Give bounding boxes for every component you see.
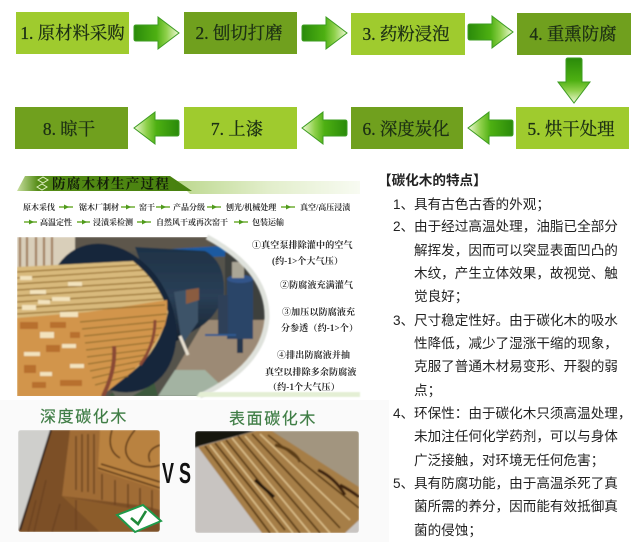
production flow text: 高温定性 xyxy=(40,217,72,227)
point 2: 2、 xyxy=(393,219,414,234)
step 1 xyxy=(16,12,129,54)
point 1: 具有古色古香的外观； xyxy=(414,196,550,213)
production flow text: 产品分级 xyxy=(173,202,205,212)
VS label: VS xyxy=(162,458,196,490)
heading band xyxy=(17,176,360,194)
point 5 xyxy=(393,475,618,539)
arrow 2 to 3 xyxy=(302,17,347,49)
numbered process notes: ③加压以防腐液充 xyxy=(282,306,355,317)
numbered process notes: （约-1个大气压） xyxy=(268,381,340,392)
step 5: 5. 烘干处理 xyxy=(528,119,615,139)
arrow 6 to 7 xyxy=(302,112,347,144)
heading band: 防腐木材生产过程 xyxy=(52,176,170,192)
production flow text: 包装运输 xyxy=(252,217,284,227)
point 5: 5、 xyxy=(393,476,414,491)
numbered process notes: ②防腐液充满灌气 xyxy=(280,279,353,290)
white curved panel edge xyxy=(200,237,267,396)
arrow 5 to 6 xyxy=(468,112,513,144)
numbered process notes: ④排出防腐液并抽 xyxy=(277,349,350,360)
step 6: 6. 深度炭化 xyxy=(363,119,449,139)
arrow 4 to 5 xyxy=(558,58,590,103)
floor xyxy=(175,319,265,384)
step 3 xyxy=(351,13,465,55)
numbered process notes xyxy=(252,239,358,392)
production flow text: 真空/高压浸渍 xyxy=(300,202,351,212)
point 1: 1、 xyxy=(393,197,414,212)
photo: surface carbonized wood xyxy=(195,431,359,533)
point 3: 尺寸稳定性好。由于碳化木的吸水 xyxy=(414,313,618,328)
point 3: 性降低，减少了湿涨干缩的现象， xyxy=(414,336,618,351)
step 8 xyxy=(15,107,128,149)
point 4 xyxy=(393,405,632,469)
point 3: 3、 xyxy=(393,313,414,328)
panel: preservative wood production process xyxy=(17,176,360,415)
numbered process notes: 分参透（约-1>个） xyxy=(281,322,358,333)
photo: deep carbonized wood xyxy=(18,430,160,532)
production flow text: 原木采伐 xyxy=(23,202,55,212)
heading: 【碳化木的特点】 xyxy=(378,172,487,188)
point 3 xyxy=(393,313,618,399)
lumber stack xyxy=(17,261,168,397)
tank body xyxy=(135,247,224,345)
production flow text xyxy=(23,202,351,227)
point 5: 菌的侵蚀； xyxy=(414,522,482,539)
icon: green check badge xyxy=(117,505,161,532)
production flow text: 窑干 xyxy=(139,202,155,212)
production flow text: 浸渍采检测 xyxy=(93,217,133,227)
point 2: 觉良好； xyxy=(414,289,468,305)
point 5: 具有防腐功能，由于高温杀死了真 xyxy=(414,475,618,491)
point 3: 点； xyxy=(414,383,441,399)
photo: wood stack entering treatment tank xyxy=(17,237,266,396)
step 7 xyxy=(184,107,297,149)
flow chart: eight process steps xyxy=(15,12,631,149)
point 4: 未加注任何化学药剂，可以与身体 xyxy=(414,429,618,444)
point 2: 解挥发，因而可以突显表面凹凸的 xyxy=(414,243,618,258)
point 4: 4、 xyxy=(393,406,414,421)
point 4: 环保性：由于碳化木只须高温处理， xyxy=(414,405,632,421)
step 2: 2. 刨切打磨 xyxy=(196,23,282,43)
production flow text: 锯木厂制材 xyxy=(79,202,119,212)
step 4 xyxy=(517,13,631,55)
step 5 xyxy=(516,107,629,149)
background panel: lower left xyxy=(0,400,389,542)
point 3: 克服了普通木材易变形、开裂的弱 xyxy=(414,359,618,374)
bottom green fade xyxy=(196,392,360,397)
label: surface carbonized: 表面碳化木 xyxy=(229,410,317,428)
tank rim xyxy=(58,243,176,393)
arrow 7 to 8 xyxy=(134,112,179,144)
step 1: 1. 原材料采购 xyxy=(20,23,125,43)
step 6 xyxy=(351,107,463,149)
point 2: 由于经过高温处理，油脂已全部分 xyxy=(414,218,618,234)
arrow 1 to 2 xyxy=(134,17,179,49)
straps xyxy=(103,346,114,396)
point 5: 菌所需的养分，因而能有效抵御真 xyxy=(414,499,618,514)
point 2 xyxy=(393,218,618,305)
step 7: 7. 上漆 xyxy=(211,119,263,139)
point 4: 广泛接触，对环境无任何危害； xyxy=(414,452,604,469)
arrow 3 to 4 xyxy=(468,16,513,48)
step 2 xyxy=(184,12,297,54)
step 3: 3. 药粉浸泡 xyxy=(363,24,449,44)
step 4: 4. 重熏防腐 xyxy=(530,24,616,44)
production flow text: 自然风干或再次窑干 xyxy=(156,217,228,227)
numbered process notes: 真空以排除多余防腐液 xyxy=(265,366,357,377)
numbered process notes: (约-1>个大气压） xyxy=(272,255,343,266)
production flow text: 刨光/机械处理 xyxy=(226,202,276,212)
point 2: 木纹，产生立体效果，故视觉、触 xyxy=(414,266,618,281)
numbered process notes: ①真空泵排除灌中的空气 xyxy=(252,239,353,250)
step 8: 8. 晾干 xyxy=(43,119,95,139)
panel: deep versus surface carbonized wood comparison xyxy=(18,408,359,533)
label: deep carbonized: 深度碳化木 xyxy=(40,408,128,426)
text block: characteristics of carbonized wood xyxy=(378,172,632,539)
